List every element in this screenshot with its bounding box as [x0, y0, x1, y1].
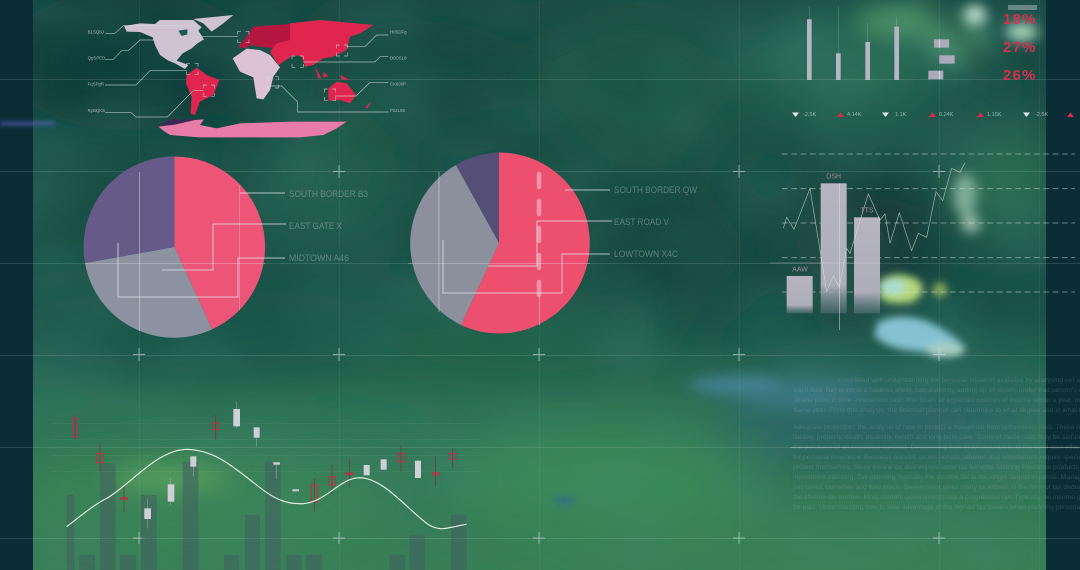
bar labels: TTS [860, 208, 874, 215]
slice labels: EAST ROAD V [614, 217, 670, 228]
percentage readouts [1003, 11, 1037, 84]
leader lines [85, 172, 286, 331]
antarctica [158, 119, 203, 126]
map region codes: FqSPgR [88, 82, 104, 87]
white candles [144, 402, 421, 528]
ticker row: -2.5K [803, 112, 816, 118]
small header tag [1008, 5, 1037, 10]
ticker row: 4.14K [847, 112, 862, 118]
bar labels [792, 173, 874, 273]
slice labels [289, 189, 368, 264]
volume bars [67, 462, 467, 570]
map region codes: D0OSL8 [390, 56, 407, 61]
bar labels: DSH [826, 173, 841, 180]
map region codes: RyBQKS [88, 108, 105, 113]
ticker row: 1.1K [895, 112, 907, 118]
ticker row: 1.15K [987, 112, 1002, 118]
world map [88, 15, 407, 137]
slices [84, 156, 265, 338]
slice labels: LOWTOWN X4C [614, 249, 678, 260]
dashed guide lines [782, 154, 1075, 292]
map region codes: H0SDFg [390, 30, 407, 35]
smoothed trend curve [67, 449, 467, 529]
body text block bottom right [793, 377, 1080, 511]
map leader lines and target brackets [105, 26, 388, 117]
bar labels: AAW [792, 266, 808, 273]
slice labels [614, 185, 697, 260]
leader lines [408, 172, 612, 325]
map region codes [88, 30, 407, 113]
glow streak left [0, 122, 55, 125]
top right bar chart [807, 7, 955, 80]
ticker row: 0.24K [939, 112, 954, 118]
slices [410, 152, 590, 333]
slice labels: MIDTOWN A46 [289, 253, 349, 264]
pie chart left [84, 156, 368, 338]
floating blocks [928, 39, 955, 79]
right bar and line chart [770, 154, 1075, 330]
slice labels: EAST GATE X [289, 221, 343, 232]
map region codes: QgSPED [88, 56, 105, 61]
map region codes: CK8J0P [390, 82, 406, 87]
pie chart right [408, 152, 697, 333]
ticker row [792, 112, 1074, 118]
slice labels: SOUTH BORDER B3 [289, 189, 368, 200]
percentage readouts: 18% [1003, 11, 1037, 28]
red candles [73, 415, 456, 512]
slice labels: SOUTH BORDER QW [614, 185, 697, 196]
percentage readouts: 26% [1003, 67, 1037, 84]
bottom candlestick chart [50, 402, 480, 570]
ticker row: -2.5K [1035, 112, 1048, 118]
bars [787, 183, 880, 313]
trend line [783, 163, 965, 292]
map region codes: B1SQ8J [88, 30, 104, 35]
faint chart rules [50, 423, 480, 538]
continents in red tint [186, 68, 219, 115]
dashed highlight [537, 174, 541, 296]
continents in light tint [124, 15, 233, 69]
percentage readouts: 27% [1003, 39, 1037, 56]
bars [807, 19, 899, 80]
map region codes: P22L8S [390, 108, 406, 113]
stems [809, 7, 897, 53]
